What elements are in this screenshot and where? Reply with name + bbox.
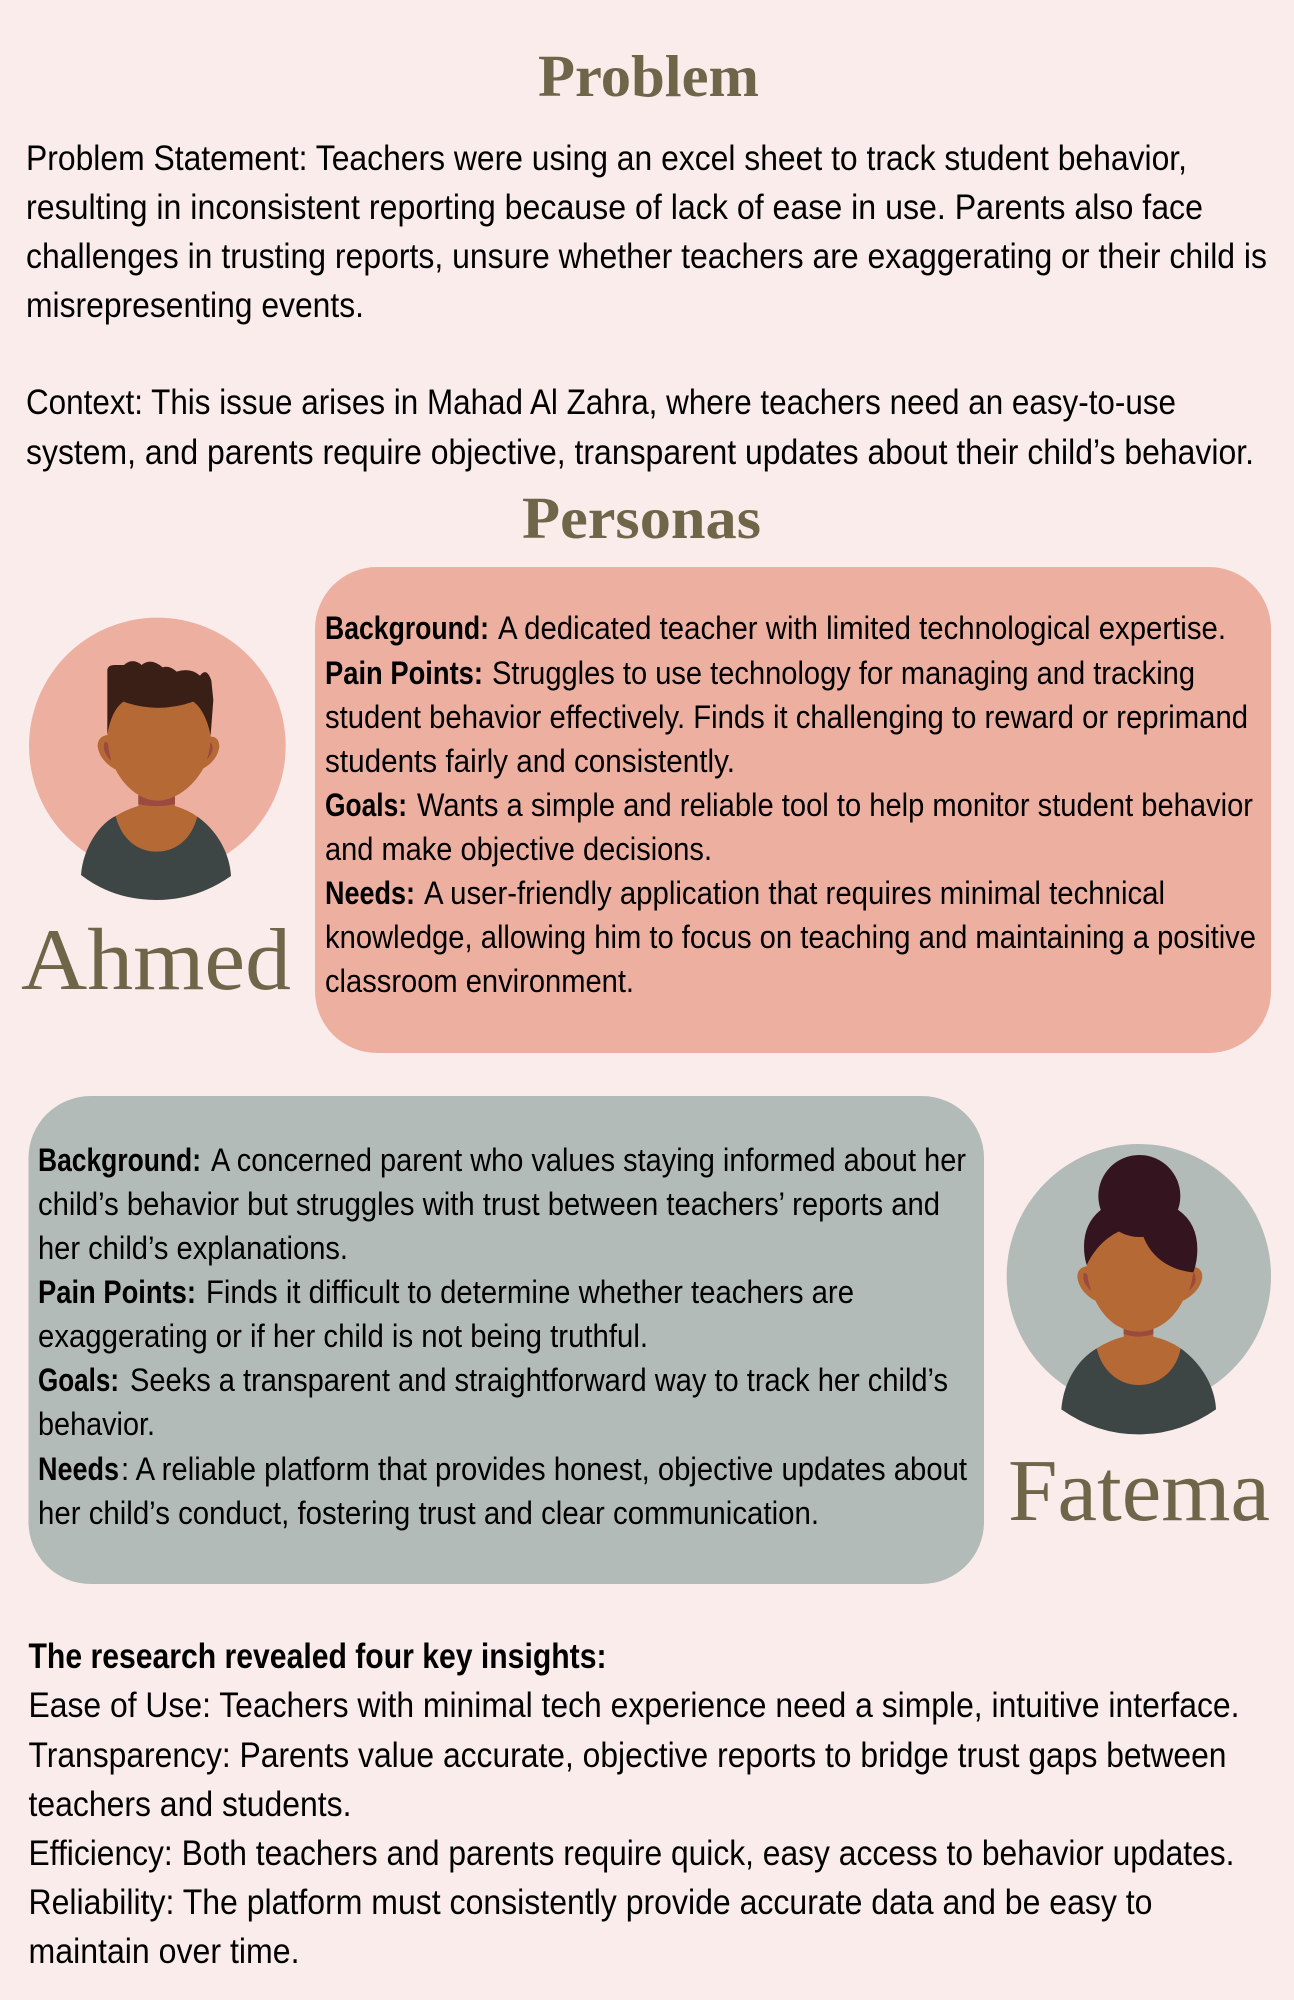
Ahmed background: A dedicated teacher with limited technological expertise. — [498, 610, 1226, 646]
text block: problem statement: resulting in inconsistent reporting because of lack of ease in use. Parents also face — [26, 188, 1203, 227]
Ahmed pain points: Struggles to use technology for managing and tracking — [492, 655, 1195, 691]
panel background — [28, 1096, 984, 1584]
avatar: Fatema — [1007, 1144, 1271, 1434]
Fatema goals: Seeks a transparent and straightforward way to track her child’s — [130, 1362, 948, 1398]
Fatema background: child’s behavior but struggles with trust between teachers’ reports and — [38, 1186, 940, 1222]
Fatema background: Background: — [38, 1142, 201, 1178]
text block: problem statement: Problem Statement: Teachers were using an excel sheet to track student behavior, — [26, 139, 1187, 178]
Fatema pain points: Pain Points: — [38, 1274, 196, 1310]
Fatema goals — [38, 1362, 948, 1442]
insight: transparency — [28, 1736, 1226, 1824]
insight: reliability — [28, 1883, 1152, 1971]
Ahmed pain points — [325, 655, 1248, 779]
Fatema goals: Goals: — [38, 1362, 119, 1398]
Ahmed goals: Goals: — [325, 787, 407, 823]
Fatema background: A concerned parent who values staying informed about her — [211, 1142, 966, 1178]
Ahmed pain points: Pain Points: — [325, 655, 483, 691]
Ahmed needs: Needs: — [325, 875, 415, 911]
insight: reliability: maintain over time. — [28, 1932, 300, 1971]
panel: Fatema persona — [28, 1096, 984, 1584]
name: Ahmed: Ahmed — [21, 912, 291, 1009]
Ahmed needs: A user-friendly application that requires minimal technical — [424, 875, 1165, 911]
Fatema goals: behavior. — [38, 1406, 155, 1442]
name: Fatema: Fatema — [1008, 1443, 1270, 1540]
avatar: Ahmed — [29, 618, 286, 900]
Ahmed needs — [325, 875, 1256, 999]
panel: Ahmed persona — [315, 567, 1271, 1053]
text block: context — [26, 383, 1254, 472]
Ahmed pain points: students fairly and consistently. — [325, 743, 735, 779]
text block: research insights — [28, 1637, 1240, 1971]
insights heading: The research revealed four key insights: — [28, 1637, 606, 1676]
Fatema background — [38, 1142, 966, 1266]
Ahmed goals — [325, 787, 1253, 867]
heading: Problem: Problem — [538, 43, 759, 109]
Fatema needs: : A reliable platform that provides honest, objective updates about — [121, 1451, 967, 1487]
Fatema pain points: exaggerating or if her child is not being truthful. — [38, 1318, 648, 1354]
Fatema needs: Needs — [38, 1451, 119, 1487]
heading: Personas: Personas — [522, 485, 761, 551]
Fatema pain points: Finds it difficult to determine whether teachers are — [206, 1274, 854, 1310]
panel background — [315, 567, 1271, 1053]
text block: problem statement — [26, 139, 1267, 325]
insight: transparency: teachers and students. — [28, 1785, 352, 1824]
Fatema needs — [38, 1451, 967, 1531]
Ahmed goals: and make objective decisions. — [325, 831, 712, 867]
Ahmed needs: classroom environment. — [325, 963, 634, 999]
Fatema background: her child’s explanations. — [38, 1230, 348, 1266]
Fatema pain points — [38, 1274, 854, 1354]
Fatema needs: her child’s conduct, fostering trust and clear communication. — [38, 1495, 819, 1531]
Ahmed background: Background: — [325, 610, 489, 646]
text block: problem statement: misrepresenting events. — [26, 286, 364, 325]
insight: reliability: Reliability: The platform must consistently provide accurate data and be easy to — [28, 1883, 1152, 1922]
text block: context: Context: This issue arises in Mahad Al Zahra, where teachers need an easy-to-use — [26, 383, 1176, 422]
